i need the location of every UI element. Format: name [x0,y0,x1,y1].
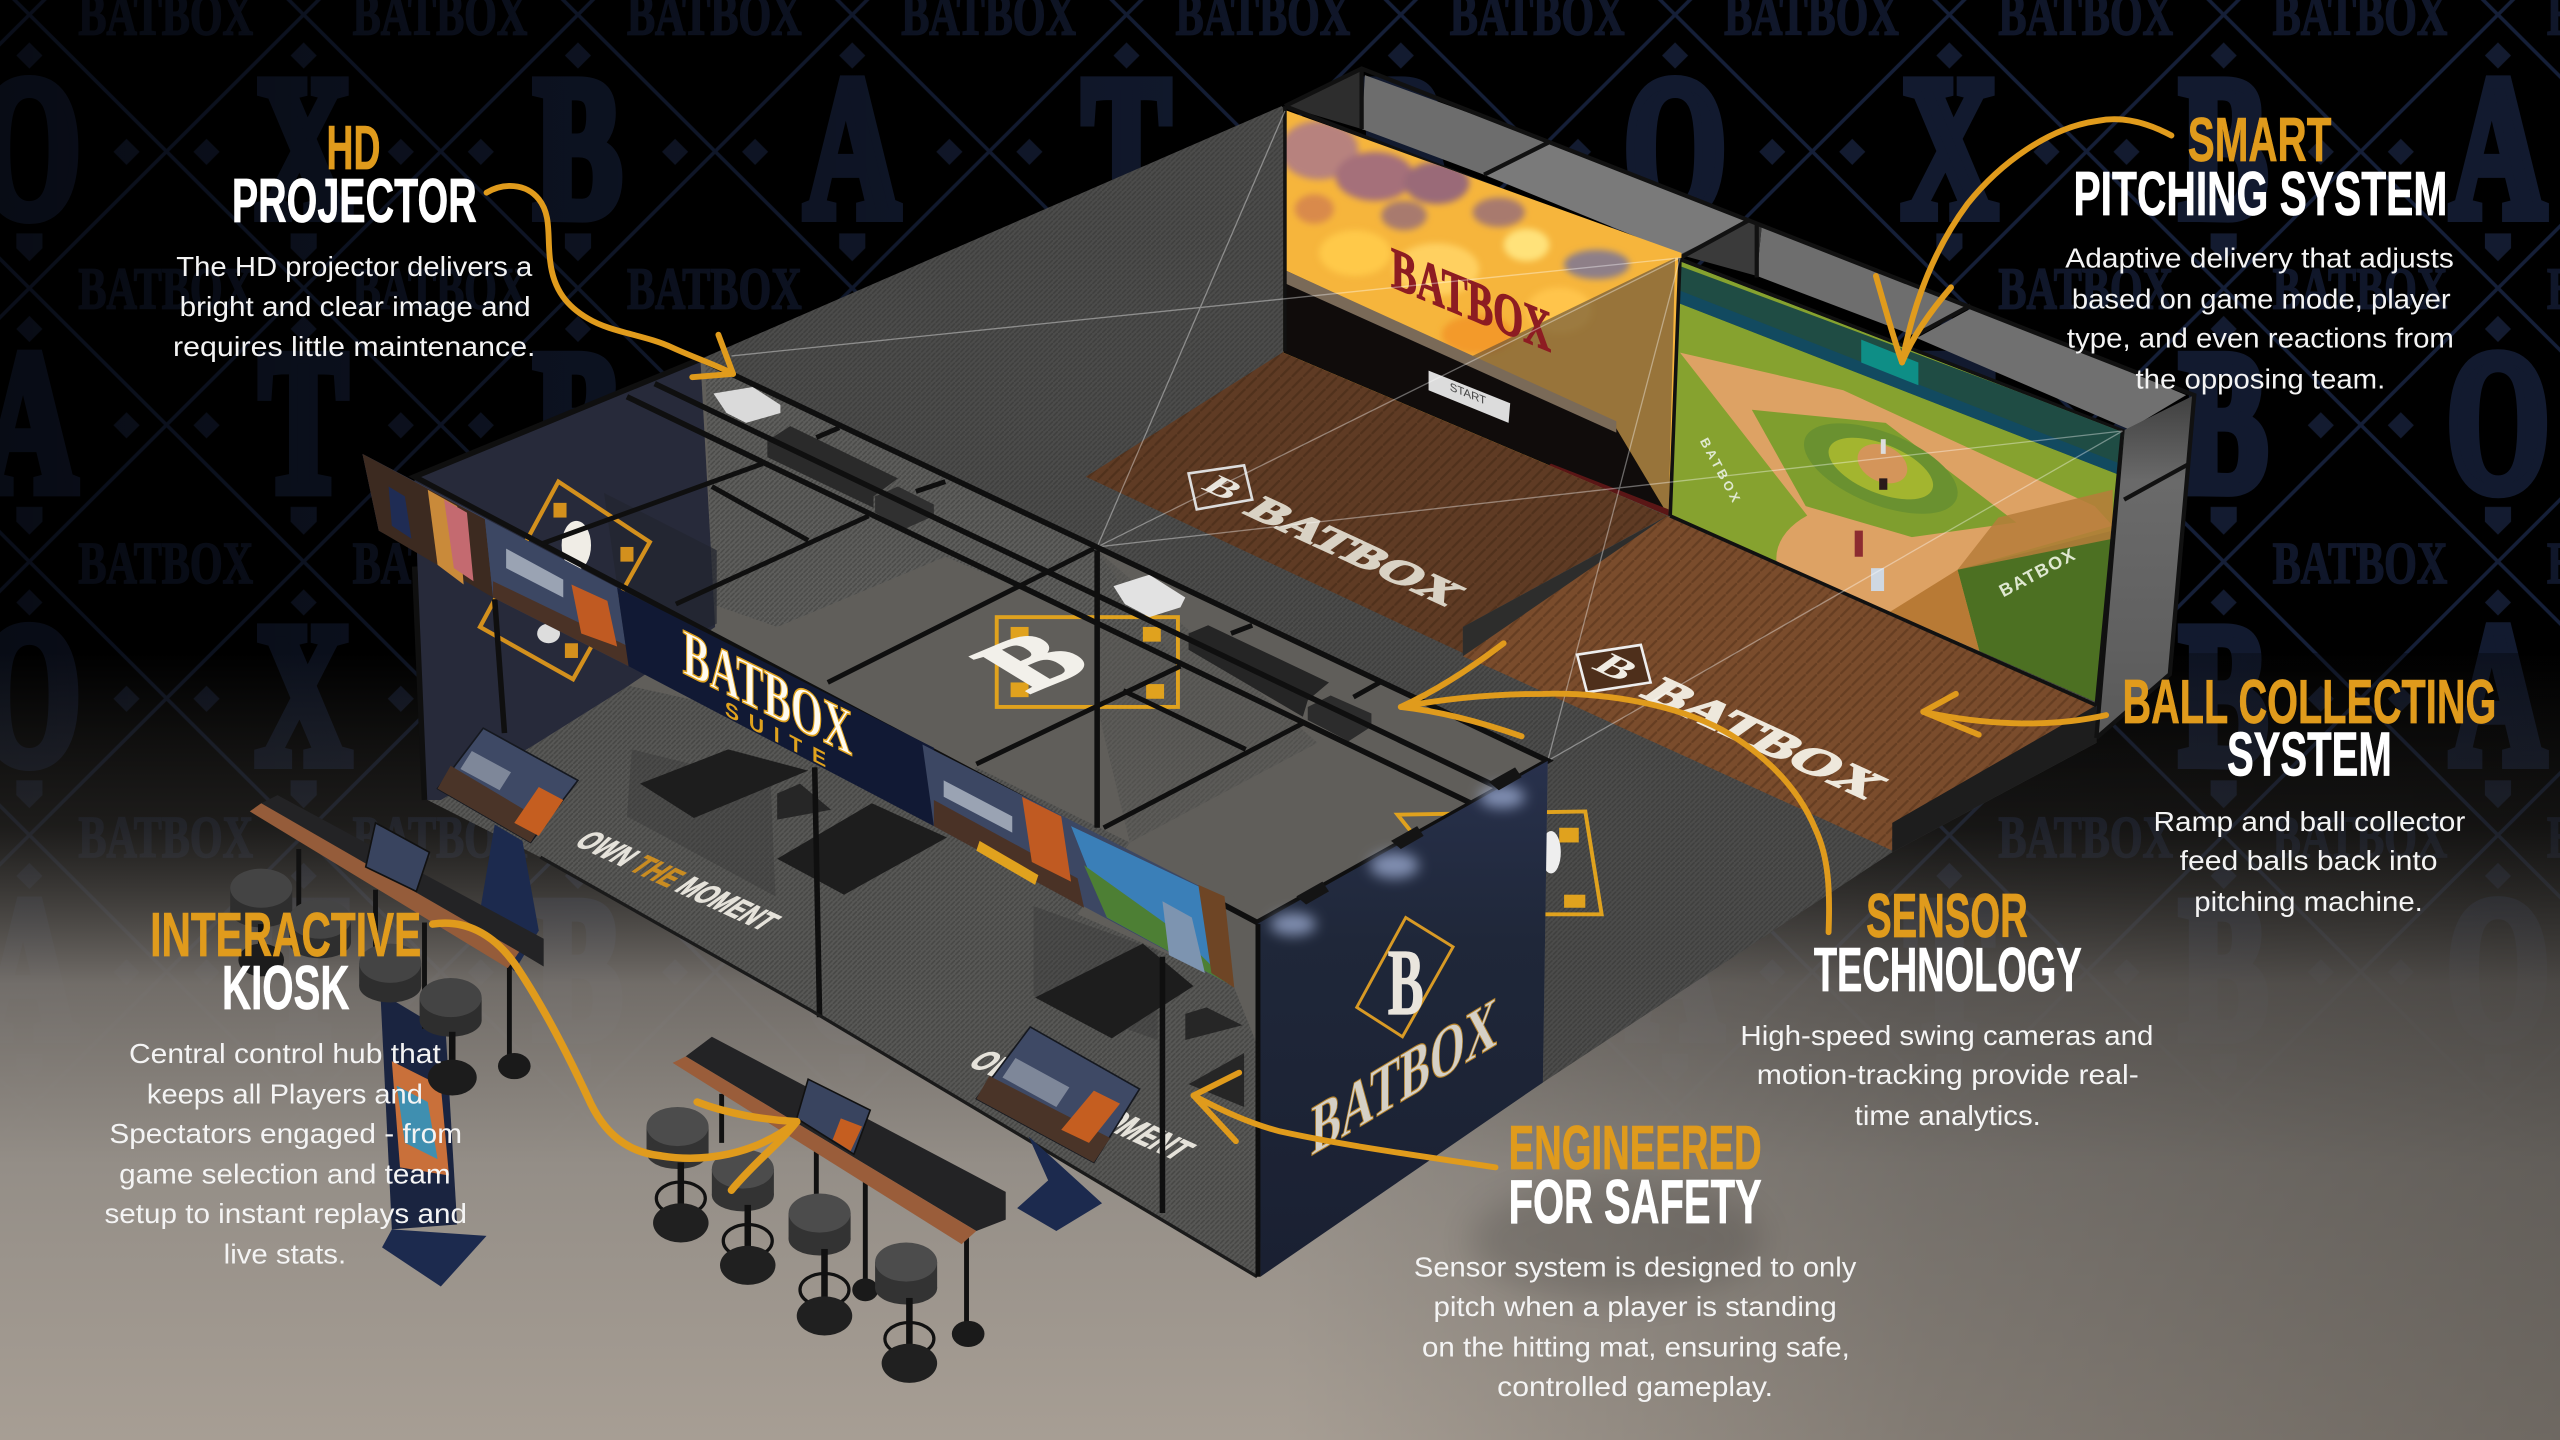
floor logo: large B, front bay: B [949,617,1116,706]
heading: SENSOR [1866,882,2028,951]
pattern: large monogram letters: OXBATBOXBA [0,582,2546,806]
arrow: engineered for safety [1193,1073,1496,1167]
body text: based on game mode, player [2072,284,2451,315]
counter legs [299,849,509,1061]
arrow: sensor technology [1401,643,1829,932]
body text [2065,243,2454,395]
pattern: small BATBOX wordmarks: BATBOX [1998,257,2173,322]
counter tray [686,1037,1006,1231]
wood lane text: BATBOX [1631,671,1899,805]
body text [1740,1020,2153,1131]
wood lane logo: B [1194,470,1253,505]
pattern: small BATBOX wordmarks: BATBOX [2273,257,2447,322]
pitcher mound [1858,444,1908,484]
pattern: large monogram letters: ATBOXBATBO [0,857,2549,1081]
heading: PROJECTOR [232,167,477,236]
stools [647,1107,937,1383]
wood lane text: BATBOX [1235,491,1475,611]
field brand: BATBOX [1996,544,2079,601]
left navy side wall with gold diamond [415,359,717,800]
body text: game selection and team [119,1159,451,1190]
pattern: large monogram letters: OXBATBOXBA [0,35,2546,259]
infield grass [1752,410,2016,537]
heading: SMART [2188,106,2332,175]
body text: time analytics. [1855,1100,2041,1131]
body text: pitching machine. [2194,886,2423,917]
body text: controlled gameplay. [1497,1371,1773,1402]
body text: Ramp and ball collector [2153,806,2465,837]
pattern: large monogram letters [0,35,2549,1081]
right navy branded wall [1256,761,1548,1277]
arrow: ball collecting system [1923,694,2106,735]
body text: setup to instant replays and [104,1198,467,1229]
heading [150,901,421,1023]
floor logo: second B, right bay [1398,811,1602,914]
brand text on screen: BATBOX [1391,235,1551,366]
arrow: smart pitching system [1876,119,2171,362]
pattern: small BATBOX wordmarks: BATBOX [78,805,253,870]
heading [2073,106,2447,229]
body text: High-speed swing cameras and [1740,1020,2153,1051]
pattern: small BATBOX wordmarks: BATBOX [78,257,253,322]
suite: interior carpet [428,686,1257,1277]
counter 2 with stools [647,1037,1006,1383]
suite: right bay carpet strip [1096,549,1318,842]
heading: TECHNOLOGY [1814,936,2082,1005]
body text: keeps all Players and [147,1079,423,1110]
signage band: BATBOX SUITE banner [617,588,934,826]
body text [2153,806,2465,917]
body text: on the hitting mat, ensuring safe, [1422,1332,1850,1363]
heading: FOR SAFETY [1509,1168,1762,1237]
heading: SYSTEM [2227,721,2392,790]
lower right grass [1958,531,2113,705]
projector light lines [731,111,2122,761]
stadium silhouette [1283,269,1669,516]
suite: concrete floor [415,362,1548,1277]
suite: back carpet strip [705,362,1179,666]
counter 1 with stools [230,795,544,1096]
body text: Adaptive delivery that adjusts [2065,243,2454,274]
body text: the opposing team. [2136,364,2385,395]
tablet [797,1079,870,1154]
callout: ball collecting system [2122,668,2496,917]
body text: feed balls back into [2180,845,2438,876]
pattern: small BATBOX wordmarks: BATBOX [2273,805,2447,870]
body text: bright and clear image and [180,291,531,322]
signage band: BATBOX SUITE banner: SUITE [725,696,826,772]
wall wordmark: BATBOX [1311,980,1497,1172]
signage band: left screen [362,454,629,666]
carpet text: OWN THE MOMENT [567,826,788,936]
arrow: interactive kiosk [433,923,797,1190]
wall spotlights [1270,785,1525,936]
callout: sensor technology [1740,882,2153,1131]
pattern: small BATBOX wordmarks: BATBOX [1998,805,2173,870]
mesh partitions [627,749,776,896]
wood lane logo: B [1583,648,1649,687]
wall light fixtures [1296,767,1522,904]
pattern: small BATBOX wordmarks: BATBOX [627,257,802,322]
body text [104,1038,467,1270]
pattern: small BATBOX wordmarks: BATBOX [353,257,527,322]
pattern: small BATBOX wordmarks: BATBOX [2273,531,2447,596]
projector 1 [713,387,780,423]
body text: Central control hub that [129,1038,441,1069]
body text: Sensor system is designed to only [1414,1252,1856,1283]
players [1855,531,1863,557]
kiosk 1 [438,728,578,971]
signage band: right screen [922,744,1234,988]
heading [232,114,477,236]
start button [1429,371,1510,423]
body text [1414,1252,1856,1402]
projector 2 [1113,575,1185,617]
pattern: small BATBOX wordmarks [78,0,2560,870]
pattern: small BATBOX wordmarks: BATBOX [353,805,527,870]
counter wood strip [250,803,519,968]
screen: baseball field: BATBOX [1697,435,1745,507]
top frame panels [1285,69,2194,738]
screen: fiery start screen [1273,98,1690,522]
floor gradient [0,653,2560,1440]
callout: interactive kiosk [104,901,467,1270]
counter legs [722,1094,967,1326]
pattern: small BATBOX wordmarks: BATBOX [78,531,253,596]
heading [1509,1114,1762,1237]
dirt infield [1680,353,2113,661]
wood floor: left lane [1086,351,1667,656]
tablet [366,823,429,891]
callout: HD projector [173,114,536,362]
counter tray [261,795,544,967]
body text: requires little maintenance. [173,331,536,362]
carpet platform [415,106,2096,1277]
pattern: large monogram letters: ATBOXBATBO [0,310,2549,534]
heading [2122,668,2496,790]
stools [230,869,482,1096]
heading: INTERACTIVE [150,901,421,970]
heading: ENGINEERED [1509,1114,1762,1183]
wall logo diamond [1357,918,1453,1037]
arrow: HD projector [487,186,733,377]
heading: HD [327,114,380,183]
wall logo B: B [1388,931,1424,1035]
body text: pitch when a player is standing [1433,1291,1837,1322]
screen frame [1285,106,2122,705]
wood floor: right lane [1463,516,2096,852]
body text: type, and even reactions from [2067,323,2454,354]
screen: baseball field [1670,261,2124,705]
pattern: small BATBOX wordmarks: BATBOX [353,531,527,596]
counter wood strip [673,1056,976,1244]
suite roof and post frame [415,359,1548,1277]
body text [173,251,536,362]
body text: Spectators engaged - from [109,1118,462,1149]
callout: engineered for safety [1414,1114,1856,1402]
signage band: BATBOX SUITE banner: BATBOX [682,614,852,770]
kiosk 2 [976,1027,1140,1231]
ball sensor housings [767,426,1371,741]
body text: live stats. [224,1239,346,1270]
heading [1814,882,2082,1005]
body text: motion-tracking provide real- [1757,1059,2139,1090]
batting mats [640,749,808,818]
suite: interior carpet: OWN THE MOMENT [959,1045,1203,1166]
standing banner [380,993,487,1287]
callout: smart pitching system [2065,106,2454,395]
heading: KIOSK [222,954,349,1023]
start button: START [1450,380,1486,408]
body text: The HD projector delivers a [176,251,533,282]
